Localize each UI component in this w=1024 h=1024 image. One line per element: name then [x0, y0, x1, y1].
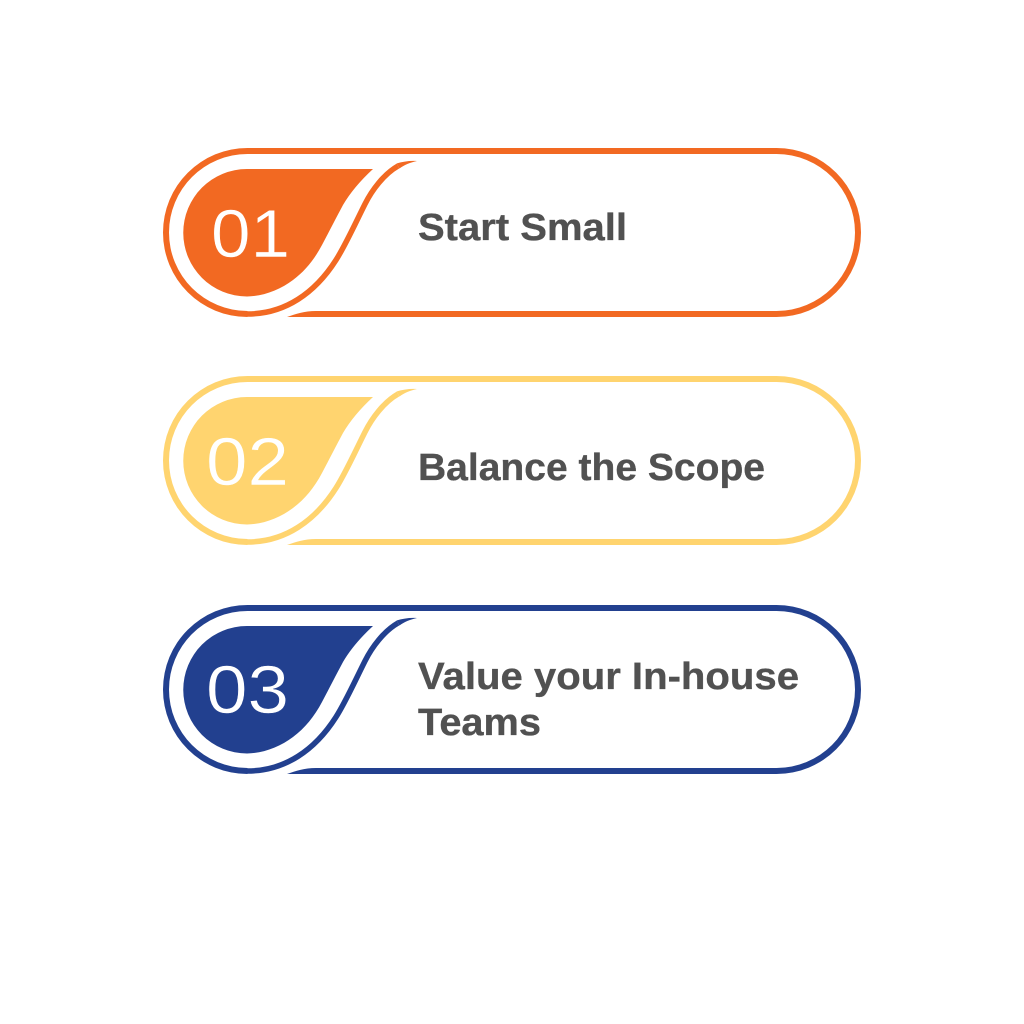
- number drop 02: [183, 397, 373, 524]
- panel: step 03: [163, 605, 861, 774]
- panel: step 01: [163, 148, 861, 317]
- heading: Value your In-house Teams: Teams: [418, 702, 541, 744]
- heading: Value your In-house Teams: Value your In-house: [418, 656, 799, 698]
- pill outline 03: [163, 605, 861, 774]
- number 03: 03: [206, 652, 289, 728]
- number drop 03: [183, 626, 373, 754]
- number drop 01: [183, 169, 373, 296]
- heading: Start Small: Start Small: [418, 207, 627, 249]
- number 01: 01: [211, 196, 290, 272]
- pill outline 01: [163, 148, 861, 317]
- heading: Balance the Scope: Balance the Scope: [418, 447, 765, 489]
- pill outline 02: [163, 376, 861, 545]
- number 02: 02: [206, 424, 289, 500]
- panel: step 02: [163, 376, 861, 545]
- heading: Value your In-house Teams: [418, 656, 799, 744]
